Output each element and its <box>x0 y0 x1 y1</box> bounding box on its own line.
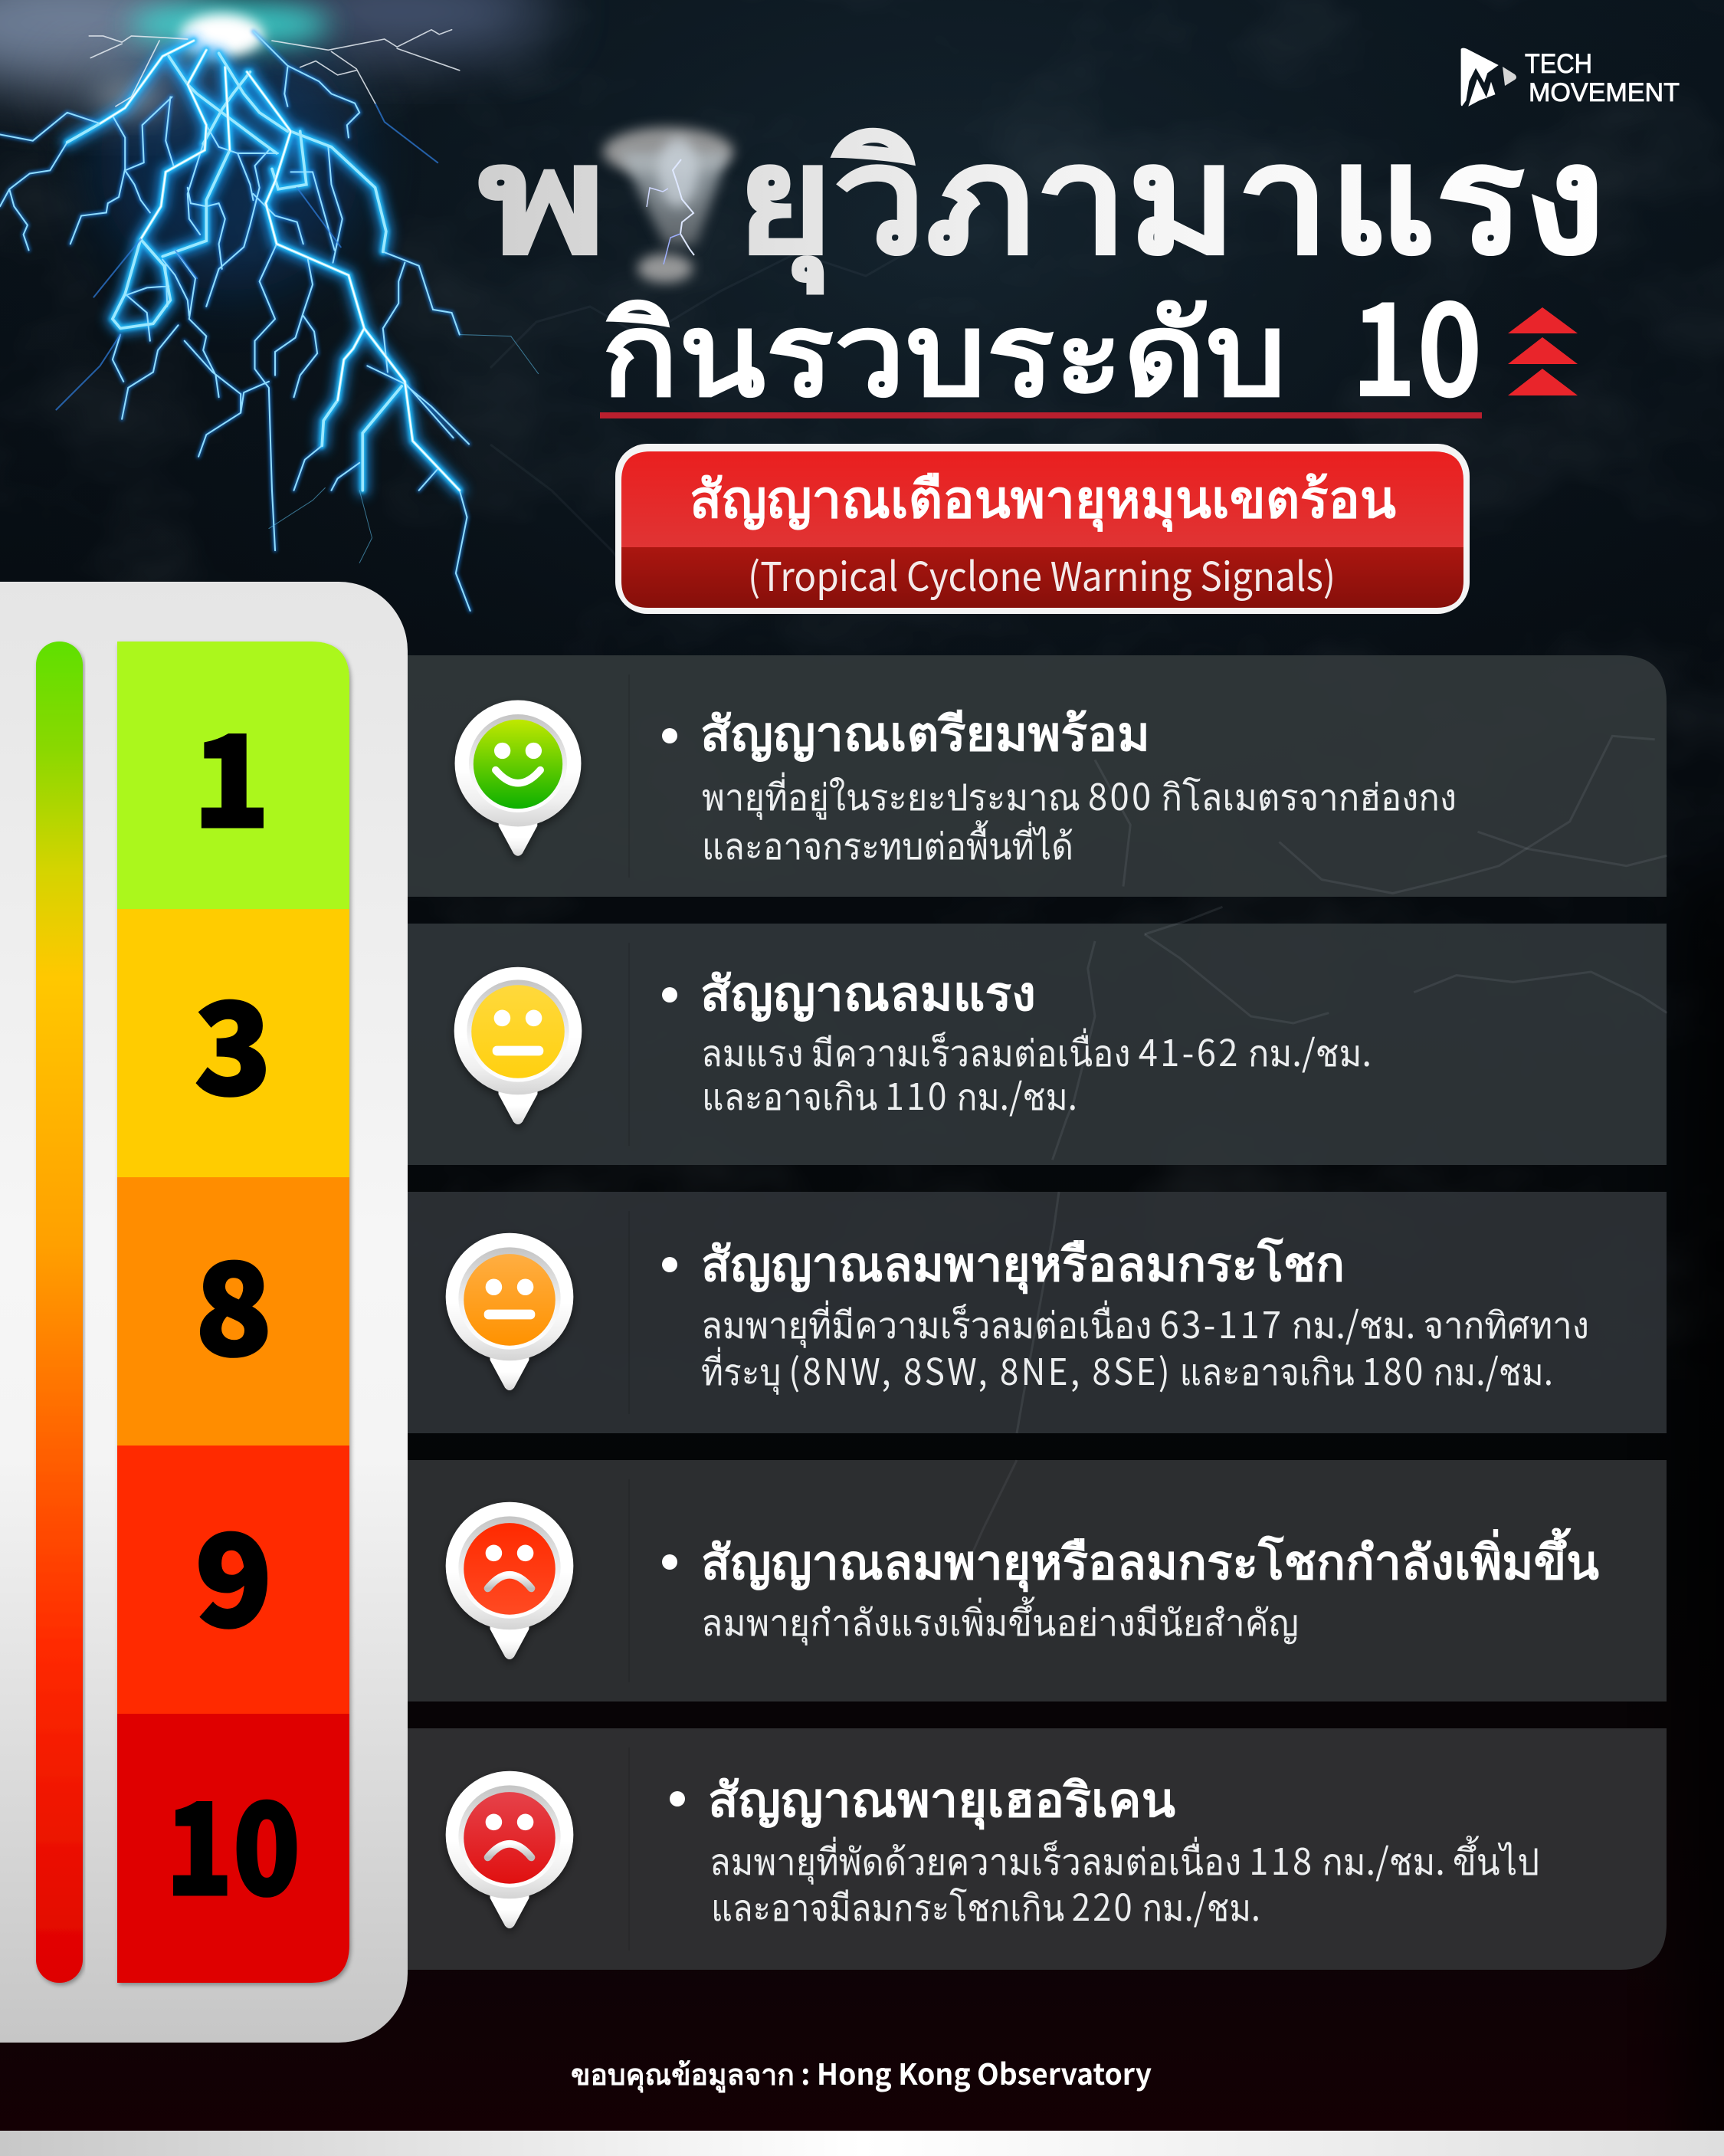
lightning texture <box>1095 736 1667 893</box>
level numbers: 3 <box>194 947 272 1131</box>
panel: level scale <box>0 582 408 2043</box>
lightning bolt <box>0 30 539 611</box>
panel: row 3 signal 8: ที่ระบุ (8NW, 8SW, 8NE, 8SE) และอาจเกิน 180 กม./ชม. <box>701 1342 1553 1396</box>
panel: row 3 signal 8: สัญญาณลมพายุหรือลมกระโชก <box>701 1236 1345 1294</box>
title line 1: พ <box>478 116 607 284</box>
level numbers: 9 <box>195 1478 273 1663</box>
banner: warning signals <box>615 444 1470 614</box>
description: ลมพายุกำลังแรงเพิ่มขึ้นอย่างมีนัยสำคัญ <box>701 1593 1299 1646</box>
level numbers: 1 <box>192 679 270 864</box>
storm clouds top left <box>0 0 552 291</box>
panel: row 1 signal 1: และอาจกระทบต่อพื้นที่ได้ <box>702 816 1073 870</box>
pin: neutral face <box>454 967 582 1124</box>
panel: row 1 signal 1: สัญญาณเตรียมพร้อม <box>700 708 1150 762</box>
pin: neutral orange face <box>446 1233 573 1390</box>
level numbers: 8 <box>195 1207 273 1392</box>
bullet and heading <box>662 1257 677 1272</box>
panel: row 2 signal 3: สัญญาณลมแรง <box>700 968 1036 1022</box>
icon: tornado with lightning <box>603 127 733 283</box>
lightning texture <box>1017 1192 1059 1433</box>
banner: warning signals: สัญญาณเตือนพายุหมุนเขตร้อน <box>690 471 1396 532</box>
lightning texture <box>961 1460 1017 1579</box>
logo: Tech Movement <box>1461 48 1680 107</box>
description: พายุที่อยู่ในระยะประมาณ 800 กิโลเมตรจากฮ่องกง <box>702 767 1457 821</box>
lightning texture <box>1053 907 1667 1160</box>
panel: row 5 signal 10: สัญญาณพายุเฮอริเคน <box>708 1774 1175 1829</box>
panel: row 5 signal 10 <box>408 1728 1667 1970</box>
description: ลมพายุที่พัดด้วยความเร็วลมต่อเนื่อง 118 กม./ชม. ขึ้นไป <box>710 1832 1539 1885</box>
banner: warning signals: (Tropical Cyclone Warning Signals) <box>748 545 1336 602</box>
description: ลมแรง มีความเร็วลมต่อเนื่อง 41-62 กม./ชม. <box>701 1023 1372 1077</box>
panel: row 4 signal 9: สัญญาณลมพายุหรือลมกระโชกกำลังเพิ่มขึ้น <box>701 1528 1599 1592</box>
bullet and heading <box>662 728 677 743</box>
panel: row 2 signal 3: และอาจเกิน 110 กม./ชม. <box>702 1067 1077 1121</box>
bottom strip <box>0 2131 1724 2156</box>
title line 1 <box>478 116 1605 294</box>
title line 1: ยุวิภามาแรง <box>736 116 1605 294</box>
panel: row 1 signal 1 <box>408 655 1667 897</box>
logo: Tech Movement: MOVEMENT <box>1529 78 1680 107</box>
icon: red up triangles <box>1508 307 1578 395</box>
title underline <box>600 412 1482 418</box>
pin: happy face <box>455 701 581 856</box>
bullet and heading <box>670 1791 685 1807</box>
gradient severity bar <box>36 642 83 1983</box>
bullet and heading <box>662 1554 677 1570</box>
panel: row 4 signal 9 <box>408 1460 1667 1702</box>
title line 2: กินรวบระดับ <box>601 290 1286 421</box>
logo: Tech Movement: TECH <box>1525 49 1592 79</box>
level numbers <box>166 679 300 1931</box>
description: ลมพายุที่มีความเร็วลมต่อเนื่อง 63-117 กม./ชม. จากทิศทาง <box>701 1295 1589 1349</box>
title line 2 <box>601 245 1483 434</box>
panel: row 3 signal 8 <box>408 1192 1667 1433</box>
title line 2: 10 <box>1351 245 1483 434</box>
level numbers: 10 <box>166 1747 300 1931</box>
bullet and heading <box>662 987 677 1003</box>
pin: sad red face <box>446 1771 573 1928</box>
level steps <box>117 642 349 1983</box>
panel: row 2 signal 3 <box>408 907 1667 1165</box>
footer credit: ขอบคุณข้อมูลจาก : Hong Kong Observatory <box>571 2051 1152 2093</box>
pin: sad orange-red face <box>446 1502 573 1659</box>
panel: row 5 signal 10: และอาจมีลมกระโชกเกิน 220 กม./ชม. <box>711 1878 1260 1931</box>
